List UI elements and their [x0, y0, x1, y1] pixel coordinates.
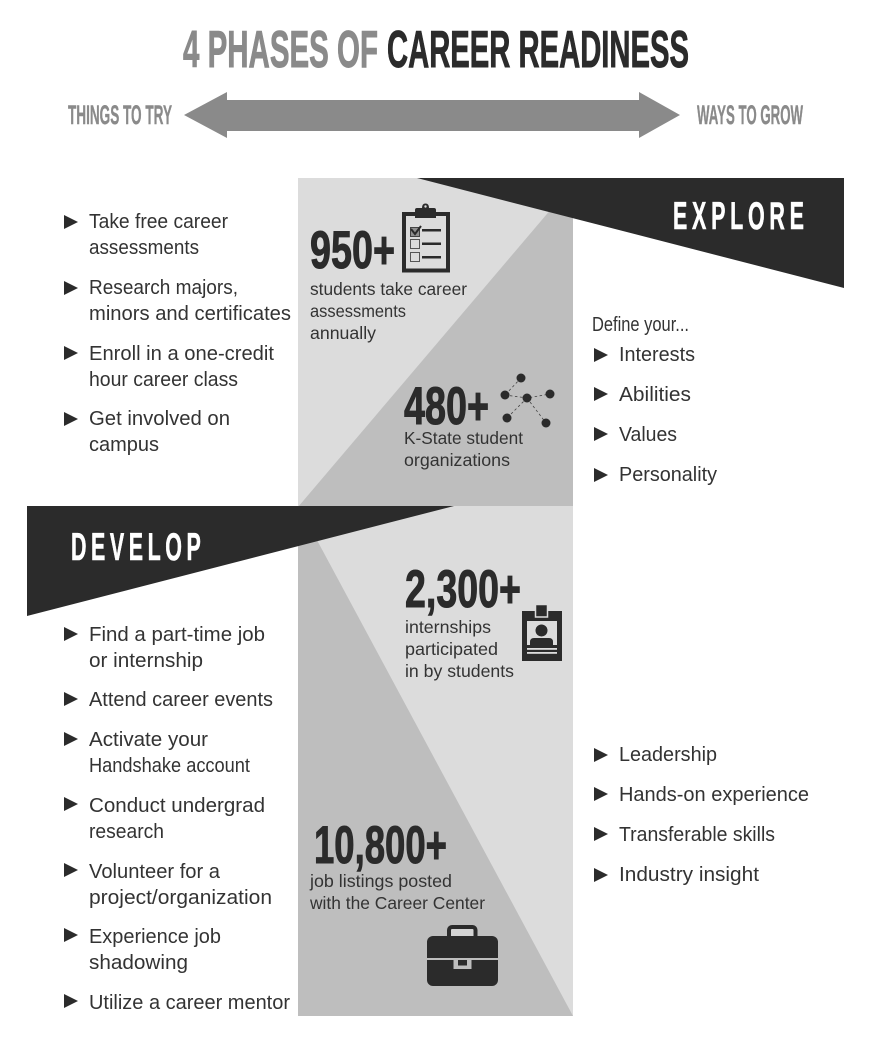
- title: 4 PHASES OF: [183, 21, 378, 79]
- stat: 10,800+: job listings posted: [309, 871, 452, 891]
- list: develop ways to grow: Hands-on experience: [619, 784, 809, 806]
- list: develop things to try: Utilize a career mentor: [89, 992, 290, 1014]
- panel: explore stats: [298, 178, 573, 507]
- list: explore ways to grow: Abilities: [619, 384, 691, 406]
- list: develop things to try: Find a part-time job: [89, 624, 265, 646]
- title: [183, 21, 689, 79]
- list: explore ways to grow: Values: [619, 424, 677, 446]
- banner: develop: [27, 506, 454, 616]
- stat: 950+: 950+: [310, 221, 395, 280]
- banner: explore: EXPLORE: [673, 194, 804, 238]
- stat: 480+: [404, 377, 523, 470]
- stat: 10,800+: [309, 816, 485, 913]
- list: develop things to try: [64, 624, 290, 1014]
- list: develop ways to grow: Transferable skills: [619, 824, 775, 846]
- list: explore ways to grow: [592, 314, 717, 486]
- list: develop things to try: research: [89, 821, 164, 843]
- list: develop things to try: Attend career events: [89, 689, 273, 711]
- list: explore things to try: [64, 211, 291, 456]
- panel: develop stats: [298, 506, 573, 1016]
- icon: network: [500, 374, 554, 428]
- double-headed arrow: [184, 92, 680, 138]
- list: explore things to try: campus: [89, 434, 159, 456]
- stat: 480+: K-State student: [404, 428, 523, 448]
- list: explore things to try: minors and certificates: [89, 303, 291, 325]
- banner: explore: [417, 178, 844, 288]
- stat: 950+: assessments: [310, 301, 406, 321]
- list: develop things to try: Handshake account: [89, 755, 250, 777]
- stat: 10,800+: 10,800+: [314, 816, 447, 875]
- list: explore things to try: Research majors,: [89, 277, 238, 299]
- stat: 950+: students take career: [310, 279, 467, 299]
- stat: 2,300+: internships: [405, 617, 491, 637]
- list: explore ways to grow: Define your...: [592, 314, 689, 336]
- stat: 480+: 480+: [404, 377, 489, 436]
- list: develop ways to grow: Leadership: [619, 744, 717, 766]
- icon: clipboard: [404, 204, 448, 270]
- list: develop things to try: Volunteer for a: [89, 861, 221, 883]
- list: develop things to try: Activate your: [89, 729, 208, 751]
- stat: 950+: annually: [310, 323, 376, 343]
- list: develop ways to grow: Industry insight: [619, 864, 759, 886]
- stat: 2,300+: in by students: [405, 661, 514, 681]
- list: explore things to try: assessments: [89, 237, 199, 259]
- list: explore things to try: hour career class: [89, 369, 238, 391]
- list: develop things to try: project/organization: [89, 887, 272, 909]
- list: explore ways to grow: Personality: [619, 464, 717, 486]
- list: explore things to try: Take free career: [89, 211, 228, 233]
- list: develop things to try: shadowing: [89, 952, 188, 974]
- icon: id badge: [522, 604, 562, 661]
- list: develop things to try: Conduct undergrad: [89, 795, 265, 817]
- list: develop ways to grow: [594, 744, 809, 886]
- label: things to try: THINGS TO TRY: [68, 100, 172, 130]
- icon: briefcase: [427, 927, 498, 986]
- list: explore things to try: Enroll in a one-credit: [89, 343, 274, 365]
- list: develop things to try: or internship: [89, 650, 203, 672]
- stat: 10,800+: with the Career Center: [309, 893, 485, 913]
- stat: 480+: organizations: [404, 450, 510, 470]
- list: develop things to try: Experience job: [89, 926, 221, 948]
- stat: 2,300+: participated: [405, 639, 498, 659]
- list: explore things to try: Get involved on: [89, 408, 230, 430]
- stat: 950+: [310, 221, 467, 343]
- list: explore ways to grow: Interests: [619, 344, 695, 366]
- stat: 2,300+: 2,300+: [405, 560, 521, 619]
- banner: develop: DEVELOP: [71, 525, 201, 569]
- stat: 2,300+: [405, 560, 521, 681]
